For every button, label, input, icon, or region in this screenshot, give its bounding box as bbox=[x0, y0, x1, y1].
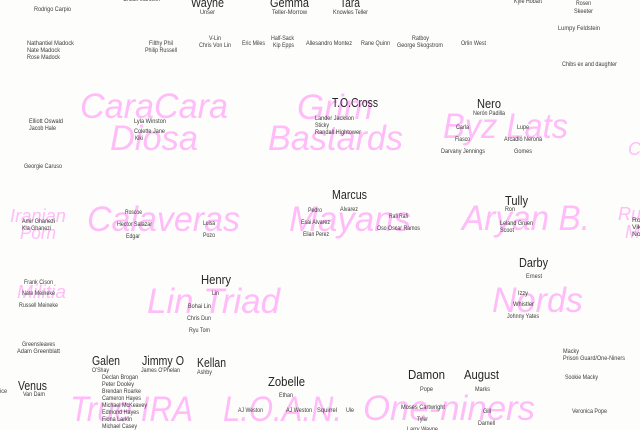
group labels: Nords bbox=[492, 281, 583, 320]
secondary character names: Kip Epps bbox=[273, 42, 295, 49]
secondary character names: Frank Cison bbox=[24, 279, 53, 286]
secondary character names: Declan Brogan bbox=[102, 374, 138, 381]
secondary character names: Skeeter bbox=[574, 8, 594, 15]
secondary character names: Randall Hightower bbox=[315, 129, 362, 136]
secondary character names: Lander Jackson bbox=[315, 115, 354, 122]
secondary character names: Ron bbox=[505, 206, 515, 213]
secondary character names: V-Lin bbox=[209, 35, 221, 42]
secondary character names: Rodrigo Carpio bbox=[34, 6, 71, 13]
secondary character names: Bohai Lin bbox=[188, 303, 211, 310]
group labels bbox=[10, 87, 640, 429]
secondary character names: Tyler bbox=[417, 416, 429, 423]
secondary character names: Ethan bbox=[279, 392, 293, 399]
secondary character names: Marks bbox=[475, 386, 491, 393]
main character names: August bbox=[464, 368, 499, 382]
secondary character names: Pope bbox=[420, 386, 433, 393]
secondary character names: Peter Dooley bbox=[102, 381, 135, 388]
secondary character names: Alvarez bbox=[340, 206, 359, 213]
secondary character names: Carla bbox=[456, 124, 469, 131]
secondary character names: Oso Oscar Ramos bbox=[377, 225, 421, 232]
secondary character names: Elian Perez bbox=[303, 231, 329, 238]
main character names: Marcus bbox=[332, 188, 367, 202]
group labels: Lin Triad bbox=[147, 282, 282, 321]
secondary character names: Unser bbox=[200, 9, 216, 16]
secondary character names: Nate Meineke bbox=[22, 290, 55, 297]
secondary character names: Izzy bbox=[518, 290, 529, 297]
secondary character names: Half-Sack bbox=[271, 35, 295, 42]
secondary character names: Edmond Hayes bbox=[102, 409, 140, 416]
secondary character names: Darvany Jennings bbox=[441, 148, 486, 155]
secondary character names: AJ Weston bbox=[286, 407, 312, 414]
secondary character names: Rosen bbox=[576, 0, 591, 7]
group labels: Bastards bbox=[268, 119, 403, 158]
secondary character names: Sookie Macky bbox=[565, 374, 599, 381]
group labels: Iranian bbox=[10, 206, 66, 226]
main character names bbox=[18, 0, 549, 393]
secondary character names: Lupe bbox=[517, 124, 529, 131]
secondary character names: Whistler bbox=[513, 301, 535, 308]
secondary character names: Macky bbox=[563, 348, 580, 355]
secondary character names: Lumpy Feldstein bbox=[558, 25, 600, 32]
secondary character names: ice bbox=[0, 388, 7, 395]
group labels: Mayans bbox=[289, 200, 411, 239]
secondary character names: Rane Quinn bbox=[361, 40, 390, 47]
secondary character names: Sticky bbox=[315, 122, 330, 129]
secondary character names: Kia Ghanezi bbox=[22, 225, 51, 232]
main character names: Tully bbox=[505, 194, 529, 208]
secondary character names: Kiki bbox=[135, 135, 143, 142]
secondary character names: Teller-Morrow bbox=[272, 9, 307, 16]
secondary character names: Arcadio Nerona bbox=[504, 136, 542, 143]
secondary character names: Prison Guard/One-Niners bbox=[563, 355, 626, 362]
secondary character names: Fiona Larkin bbox=[102, 416, 132, 423]
main character names: Zobelle bbox=[268, 375, 305, 389]
secondary character names: Roscoe bbox=[125, 209, 142, 216]
main character names: Galen bbox=[92, 354, 120, 368]
secondary character names: Scoot bbox=[500, 227, 514, 234]
secondary character names: George Skogstrom bbox=[397, 42, 443, 49]
group labels: Calaveras bbox=[87, 200, 240, 239]
secondary character names: Greensleaves bbox=[22, 341, 56, 348]
secondary character names: Gomes bbox=[514, 148, 533, 155]
secondary character names: Moses Cartwright bbox=[401, 404, 445, 411]
main character names: Nero bbox=[477, 97, 501, 111]
secondary character names: Leland Gruen bbox=[500, 220, 533, 227]
secondary character names: Gill bbox=[483, 408, 491, 415]
group labels: True IRA bbox=[70, 390, 193, 429]
secondary character names: Cameron Hayes bbox=[102, 395, 142, 402]
secondary character names: Hector Salazar bbox=[117, 221, 153, 228]
secondary character names: Pedro bbox=[308, 207, 322, 214]
secondary character names: Elliott Oswald bbox=[29, 118, 63, 125]
secondary character names: Ernest bbox=[526, 273, 542, 280]
secondary character names: Ashby bbox=[197, 369, 213, 376]
secondary character names: Brendan Roarke bbox=[102, 388, 141, 395]
secondary character names: AJ Weston bbox=[238, 407, 263, 414]
secondary character names: Nate Madock bbox=[27, 47, 61, 54]
secondary character names: Edgar bbox=[126, 233, 141, 240]
secondary character names: Ule bbox=[346, 407, 354, 414]
secondary character names: Johnny Yates bbox=[507, 313, 540, 320]
secondary character names: Georgie Caruso bbox=[24, 163, 62, 170]
secondary character names: Orlin West bbox=[461, 40, 486, 47]
secondary character names: Rafi Rafi bbox=[389, 213, 408, 220]
secondary character names: Pozo bbox=[203, 232, 215, 239]
secondary character names: Esai Alvarez bbox=[301, 219, 331, 226]
group labels: Byz Lats bbox=[443, 107, 568, 146]
group labels: Aryan B. bbox=[460, 199, 590, 238]
group labels: One-niners bbox=[363, 389, 535, 428]
main character names: Henry bbox=[201, 273, 232, 287]
main character names: Darby bbox=[519, 256, 549, 270]
group labels: Porn bbox=[20, 223, 56, 243]
secondary character names: Eric Miles bbox=[242, 40, 266, 47]
secondary character names: Lin bbox=[212, 290, 219, 297]
secondary character names: Chris Von Lin bbox=[199, 42, 231, 49]
secondary character names: Michael Casey bbox=[102, 423, 138, 430]
main character names: Damon bbox=[408, 368, 445, 382]
main character names: Venus bbox=[18, 379, 47, 393]
secondary character names: Jacob Hale bbox=[29, 125, 56, 132]
secondary character names: Philip Russell bbox=[145, 47, 177, 54]
secondary character names: Lyla Winston bbox=[134, 118, 166, 125]
secondary character names: Chris Dun bbox=[187, 315, 211, 322]
secondary character names: Colette Jane bbox=[134, 128, 165, 135]
main character names: Jimmy O bbox=[142, 354, 184, 368]
group labels: Diosa bbox=[110, 119, 198, 158]
secondary character names: Luisa bbox=[203, 220, 215, 227]
main character names: T.O.Cross bbox=[332, 96, 378, 110]
secondary character names: Darnell bbox=[478, 420, 495, 427]
secondary character names: O'Shay bbox=[92, 367, 110, 374]
secondary character names: Ratboy bbox=[412, 35, 430, 42]
secondary character names: Fiasco bbox=[455, 136, 470, 143]
secondary character names: Nathantiel Madock bbox=[27, 40, 75, 47]
group labels: CaraCara bbox=[80, 87, 228, 126]
secondary character names: Chibs ex and daughter bbox=[562, 61, 618, 68]
group labels: L.O.A.N. bbox=[223, 390, 342, 429]
secondary character names: Allesandro Montez bbox=[306, 40, 353, 47]
secondary character names: Veronica Pope bbox=[572, 408, 607, 415]
group labels: M bbox=[625, 222, 640, 242]
secondary character names: Amir Ghanezi bbox=[22, 218, 55, 225]
group labels: Grim bbox=[297, 88, 373, 127]
secondary character names: Michael McKeavey bbox=[102, 402, 148, 409]
secondary character names: Russell Meineke bbox=[19, 302, 58, 309]
main character names: Kellan bbox=[197, 356, 226, 370]
secondary character names: Knowles Teller bbox=[333, 9, 369, 16]
secondary character names: Filthy Phil bbox=[149, 40, 173, 47]
secondary character names: Adam Greenblatt bbox=[17, 348, 60, 355]
secondary character names: Rose Madock bbox=[27, 54, 61, 61]
group labels: Militia bbox=[17, 282, 66, 302]
secondary character names: Ryu Tom bbox=[189, 327, 210, 334]
secondary character names: Nerón Padilla bbox=[473, 110, 505, 117]
secondary character names: Van Dam bbox=[23, 391, 45, 398]
secondary character names: James O'Phelan bbox=[141, 367, 180, 374]
secondary character names: Squirrel bbox=[317, 407, 337, 414]
